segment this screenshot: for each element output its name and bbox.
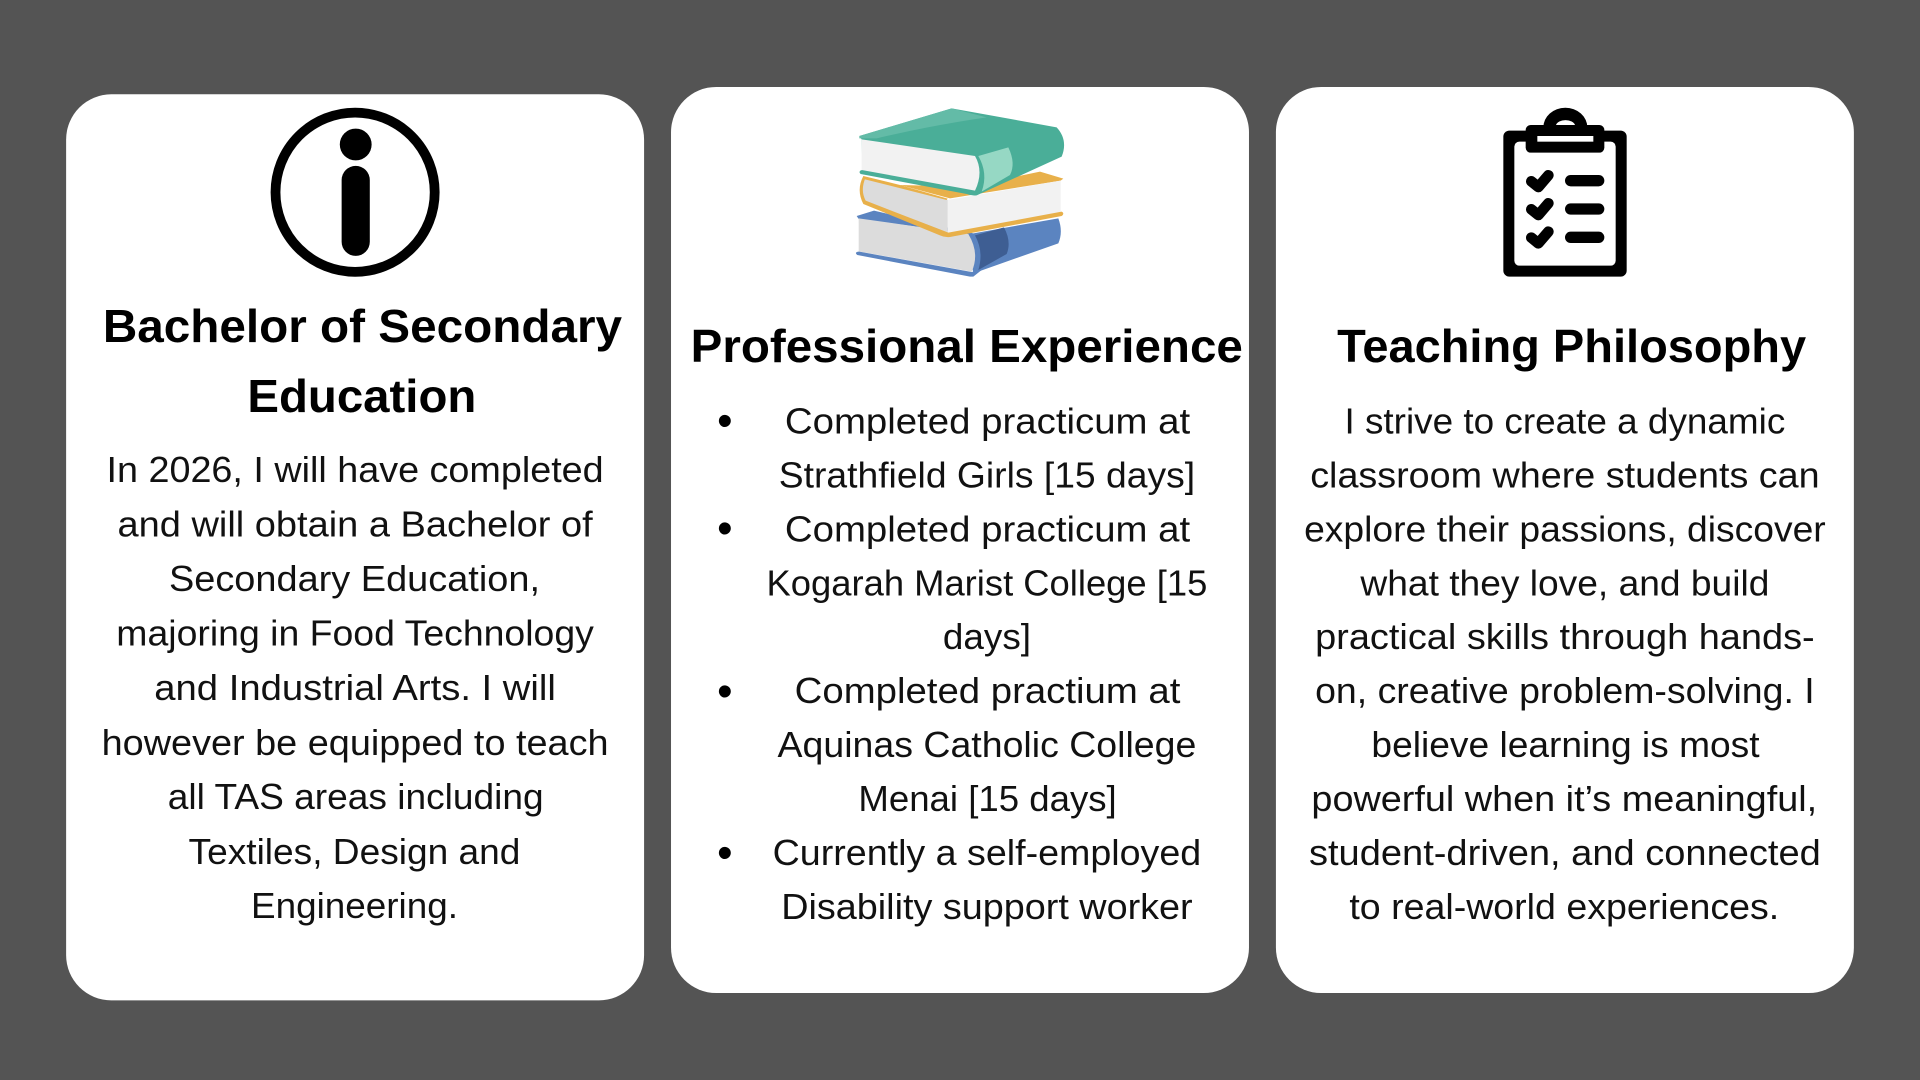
text block: philosophy statement: explore their passions, discover [1304, 508, 1826, 549]
text block: philosophy statement: what they love, and build [1359, 562, 1769, 603]
text block: degree description: and will obtain a Bachelor of [118, 503, 594, 544]
list: experience items: Completed practium at [795, 670, 1180, 711]
list: experience items: Currently a self-employed [773, 832, 1201, 873]
heading: Bachelor of Secondary Education [103, 300, 622, 422]
text block: philosophy statement: practical skills through hands- [1315, 616, 1815, 657]
text block: philosophy statement [1304, 400, 1826, 927]
text block: degree description: In 2026, I will have completed [107, 449, 604, 490]
heading: Professional Experience: Professional Experience [691, 320, 1243, 372]
list: experience items: Completed practicum at [785, 400, 1190, 441]
list: experience items: • [717, 504, 733, 553]
text block: philosophy statement: to real-world experiences. [1349, 886, 1779, 927]
text block: degree description: and Industrial Arts. I will [154, 667, 556, 708]
list: experience items: Strathfield Girls [15 days] [779, 454, 1195, 495]
panel: Bachelor of Secondary Education [66, 94, 644, 1000]
list: experience items: Menai [15 days] [858, 778, 1117, 819]
list: experience items: Aquinas Catholic College [778, 724, 1196, 765]
list: experience items: • [717, 396, 733, 445]
text block: philosophy statement: classroom where students can [1310, 454, 1820, 495]
text block: degree description [102, 449, 609, 926]
text block: philosophy statement: powerful when it’s meaningful, [1311, 778, 1817, 819]
heading: Bachelor of Secondary Education: Education [247, 370, 476, 422]
text block: philosophy statement: on, creative problem-solving. I [1315, 670, 1815, 711]
icon: clipboard checklist [1503, 108, 1627, 277]
list: experience items: days] [943, 616, 1031, 657]
panel: Teaching Philosophy [1276, 87, 1854, 993]
icon: information circle [276, 113, 435, 272]
list: experience items [717, 396, 1207, 927]
list: experience items: • [717, 829, 733, 878]
panel: Professional Experience [671, 87, 1249, 993]
heading: Bachelor of Secondary Education: Bachelor of Secondary [103, 300, 622, 352]
icon: stack of books [856, 108, 1064, 277]
heading: Teaching Philosophy: Teaching Philosophy [1337, 320, 1807, 372]
text block: degree description: Engineering. [251, 885, 458, 926]
text block: degree description: majoring in Food Technology [116, 612, 594, 653]
text block: degree description: however be equipped to teach [102, 722, 609, 763]
text block: degree description: Secondary Education, [169, 558, 540, 599]
text block: philosophy statement: I strive to create a dynamic [1344, 400, 1785, 441]
list: experience items: Completed practicum at [785, 508, 1190, 549]
list: experience items: • [717, 667, 733, 716]
list: experience items: Disability support worker [781, 886, 1193, 927]
text block: philosophy statement: believe learning is most [1371, 724, 1760, 765]
text block: philosophy statement: student-driven, and connected [1309, 832, 1821, 873]
list: experience items: Kogarah Marist College [15 [767, 562, 1207, 603]
text block: degree description: Textiles, Design and [189, 831, 520, 872]
text block: degree description: all TAS areas including [168, 776, 544, 817]
